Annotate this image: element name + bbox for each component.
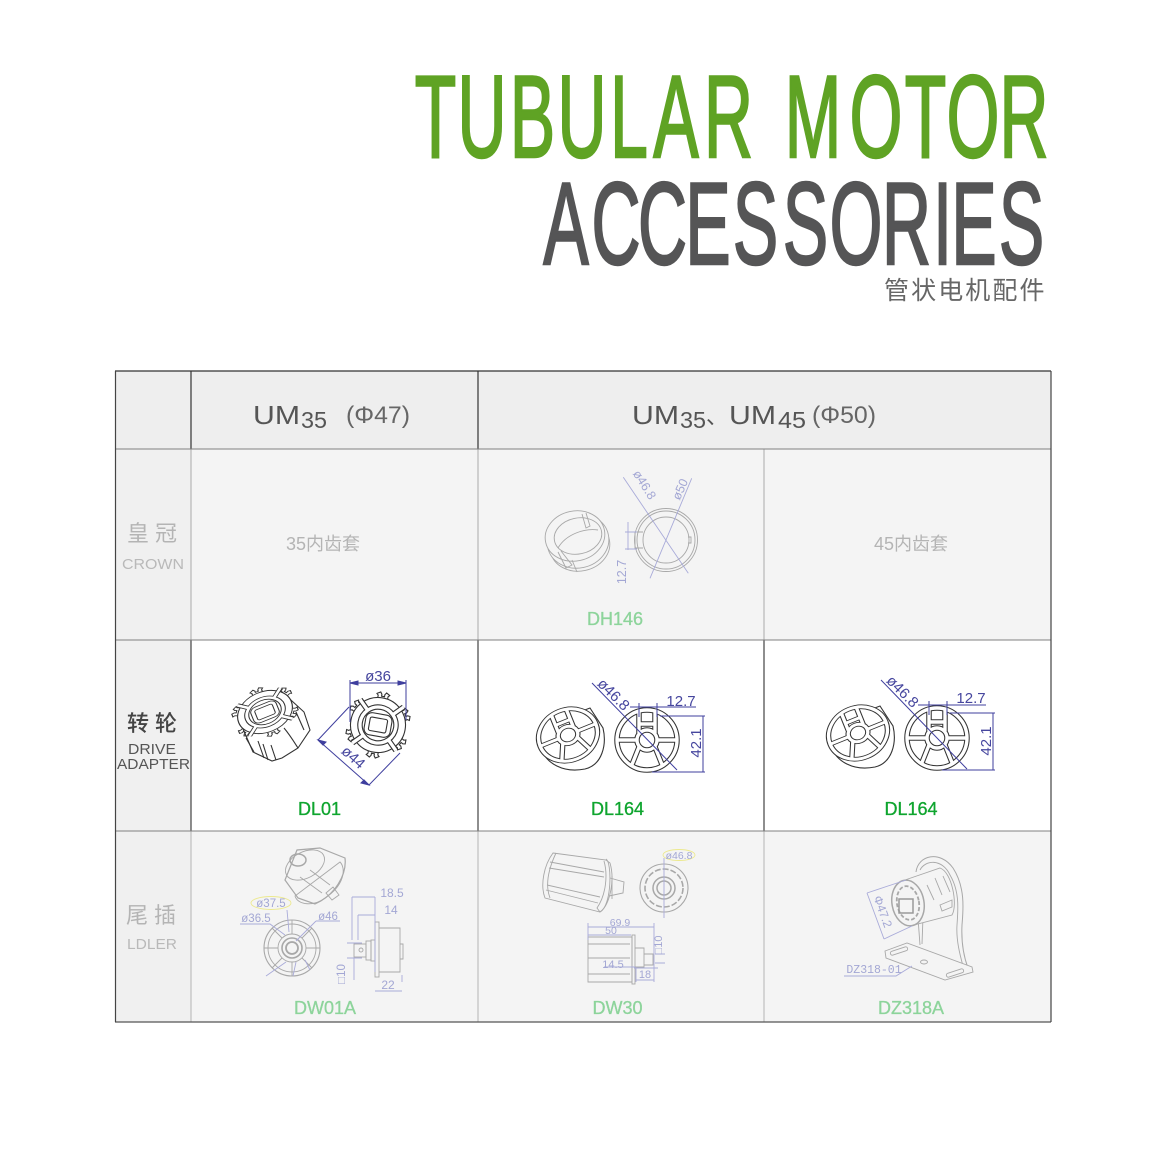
row label: drive adapter: DRIVE <box>128 741 176 758</box>
wheel dimensions <box>592 683 705 772</box>
crown dimension values: ø46.8 <box>630 468 659 502</box>
DL01 dimension values: ø44 <box>338 743 368 773</box>
drawing: DH146 crown <box>540 468 698 584</box>
title: tubular motor: TUBULAR MOTOR <box>415 52 1048 183</box>
DW30 dimensions <box>588 850 695 982</box>
note: 45 inner gear sleeve: 45内齿套 <box>874 530 948 556</box>
wheel dimension values: 12.7 <box>666 693 696 710</box>
wheel dimension values: 12.7 <box>956 690 986 707</box>
label: DL164 right: DL164 <box>884 799 938 819</box>
heading: UM35 phi 47: UM <box>253 400 300 430</box>
DL01 dimension values: ø36 <box>365 668 391 685</box>
drive adapter row background <box>191 640 1051 831</box>
crown dimension values: 12.7 <box>615 560 629 584</box>
DW30 dimension values <box>602 850 693 981</box>
drawing: DZ318A bracket idler <box>844 857 973 980</box>
wheel dimensions <box>881 680 995 770</box>
wheel front view <box>907 708 967 768</box>
wheel dimension values: ø46.8 <box>594 675 633 714</box>
DW30 dimension values: □10 <box>653 936 665 954</box>
row label: crown <box>122 516 184 573</box>
table <box>115 371 1051 1022</box>
DL01 3D view <box>225 677 310 761</box>
idler 3D view <box>280 844 345 904</box>
idler dimension values: 22 <box>381 978 395 992</box>
idler dimension values: 14 <box>384 903 398 917</box>
idler front view <box>264 920 320 976</box>
label: DH146: DH146 <box>587 609 643 629</box>
DL01 dimensions <box>318 680 406 785</box>
label: DZ318A: DZ318A <box>878 998 944 1018</box>
idler dimension values <box>241 886 404 992</box>
bracket dimension values: DZ318-01 <box>846 964 902 977</box>
crown dimensions <box>623 477 692 578</box>
wheel dimension values <box>883 672 995 756</box>
wheel dimension values: 42.1 <box>688 728 705 758</box>
wheel dimension values: 42.1 <box>978 726 995 756</box>
drawing: DL01 drive adapter <box>225 668 415 785</box>
row label: idler <box>126 898 182 953</box>
heading: UM35 UM45 phi 50: 35 <box>680 407 706 433</box>
row label: crown: 皇冠 <box>127 516 183 548</box>
heading: UM35 phi 47 <box>253 400 410 433</box>
DW30 dimension values: 18 <box>639 969 651 981</box>
crown front view <box>634 508 698 572</box>
DW30 dimension values: 50 <box>605 925 617 937</box>
crown dimension values: ø50 <box>670 477 691 502</box>
label: DL01: DL01 <box>298 799 341 819</box>
idler dimension values: ø36.5 <box>241 913 271 925</box>
bracket dimension values: Φ47.2 <box>871 894 895 930</box>
crown 3D view <box>540 505 615 577</box>
DL01 dimension values <box>338 668 391 773</box>
subtitle: chinese: 管状电机配件 <box>884 271 1047 307</box>
crown row background <box>115 449 1051 640</box>
label: DW01A: DW01A <box>294 998 356 1018</box>
heading: UM35 UM45 phi 50: (Φ50) <box>812 402 876 429</box>
crown dimension values <box>615 468 691 584</box>
bracket plate and body <box>885 857 973 980</box>
DW30 dimension values: ø46.8 <box>666 850 693 862</box>
heading: UM35 UM45 phi 50: 、 <box>706 399 728 431</box>
DL01 front view <box>341 687 415 763</box>
bracket dimension values <box>846 894 902 977</box>
row label: drive adapter: 转轮 <box>127 706 183 738</box>
wheel 3D view <box>821 698 895 768</box>
row label: crown: CROWN <box>122 556 184 573</box>
row label: idler: LDLER <box>127 936 177 953</box>
row label: idler: 尾插 <box>126 898 182 930</box>
idler row background <box>115 831 1051 1022</box>
DW30 dimension values: 69.9 <box>610 917 630 929</box>
heading: UM35 UM45 phi 50: 45 <box>778 407 806 433</box>
heading: UM35 phi 47: (Φ47) <box>346 402 410 429</box>
row label: drive adapter: ADAPTER <box>117 756 190 773</box>
note: 35 inner gear sleeve: 35内齿套 <box>286 530 360 556</box>
idler side view <box>354 922 403 977</box>
DW30 side view <box>588 935 653 984</box>
heading: UM35 UM45 phi 50: UM <box>632 400 679 430</box>
title: accessories: ACCESSORIES <box>543 159 1044 290</box>
idler dimension values: ø46 <box>318 911 338 923</box>
idler dimension values: 18.5 <box>380 886 404 900</box>
wheel front view <box>617 710 677 770</box>
idler dimension values: ø37.5 <box>256 898 286 910</box>
left column shading <box>115 449 191 1022</box>
DW30 dimension values: 14.5 <box>602 959 624 971</box>
idler dimensions <box>240 896 402 991</box>
heading: UM35 phi 47: 35 <box>301 407 327 433</box>
bracket dimensions <box>844 880 912 976</box>
heading: UM35 UM45 phi 50: UM <box>729 400 776 430</box>
drawing: DW30 idler <box>543 850 695 984</box>
bracket cylinder <box>888 868 954 928</box>
DW30 front view <box>640 864 688 912</box>
label: DW30: DW30 <box>592 998 643 1018</box>
drawing: DL164 middle column <box>531 675 705 772</box>
drawing: DL164 right column <box>821 672 995 770</box>
idler dimension values: □10 <box>336 964 348 984</box>
header row background <box>115 371 1051 449</box>
wheel dimension values: ø46.8 <box>883 672 922 711</box>
drawing: DW01A idler <box>240 844 404 992</box>
row label: drive adapter <box>117 706 190 773</box>
wheel 3D view <box>531 700 605 770</box>
heading: UM35 UM45 phi 50 <box>632 399 876 433</box>
wheel dimension values <box>594 675 705 758</box>
DW30 3D view <box>543 853 624 912</box>
label: DL164 middle: DL164 <box>591 799 644 819</box>
